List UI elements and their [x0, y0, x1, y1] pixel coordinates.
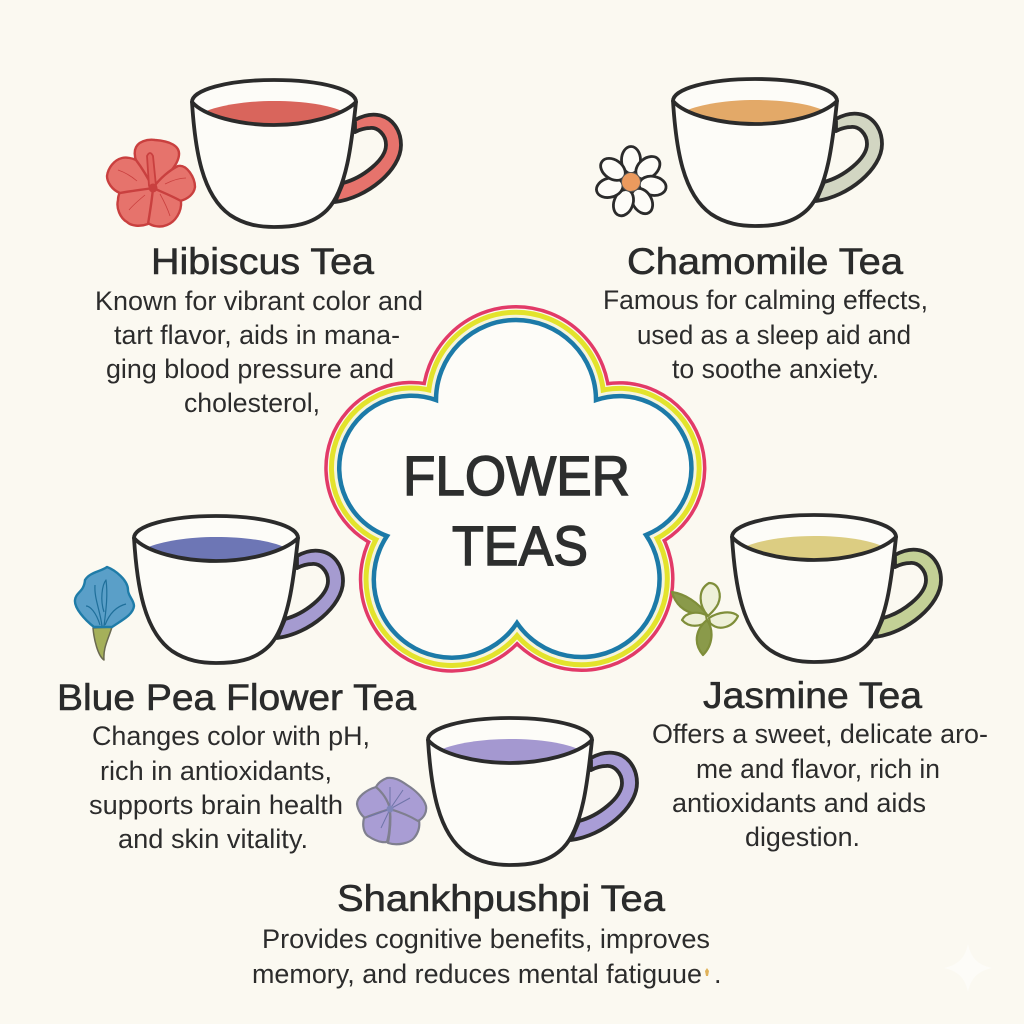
text: hibiscus description: cholesterol, — [184, 388, 320, 418]
cup: blue pea — [134, 516, 343, 663]
title: TEAS — [452, 514, 588, 577]
text: blue pea description: and skin vitality. — [118, 824, 308, 854]
icon: shankhpushpi flower — [357, 778, 426, 844]
text: hibiscus description: tart flavor, aids in mana- — [114, 320, 400, 350]
text: jasmine description: digestion. — [745, 822, 860, 852]
text: blue pea description: Changes color with pH, — [92, 721, 370, 751]
icon: jasmine flower — [672, 583, 738, 655]
cup: hibiscus — [192, 80, 401, 227]
text: jasmine description: antioxidants and aids — [672, 788, 926, 818]
icon: blue pea flower — [75, 567, 134, 660]
text: hibiscus description — [95, 286, 423, 418]
heading: jasmine: Jasmine Tea — [703, 675, 922, 716]
title — [403, 444, 630, 577]
text: blue pea description — [89, 721, 370, 854]
text: jasmine description: me and flavor, rich in — [696, 754, 940, 784]
text: shankhpushpi description — [252, 924, 722, 989]
watermark sparkle — [944, 944, 992, 992]
text: chamomile description: to soothe anxiety. — [672, 354, 879, 384]
text: shankhpushpi description: . — [714, 959, 722, 989]
central flower badge — [339, 320, 691, 658]
text: hibiscus description: ging blood pressure and — [106, 354, 394, 384]
text: chamomile description: used as a sleep aid and — [637, 320, 911, 350]
heading: chamomile: Chamomile Tea — [627, 241, 903, 282]
small gold mark — [705, 968, 709, 976]
heading: blue pea: Blue Pea Flower Tea — [57, 677, 416, 718]
text: chamomile description: Famous for calming effects, — [603, 285, 928, 315]
text: blue pea description: rich in antioxidants, — [100, 756, 332, 786]
cup: shankhpushpi — [428, 718, 637, 865]
heading: hibiscus: Hibiscus Tea — [151, 241, 374, 282]
cup: chamomile — [673, 79, 882, 226]
icon: hibiscus flower — [107, 140, 195, 226]
text: shankhpushpi description: memory, and reduces mental fatiguue — [252, 959, 702, 989]
title: FLOWER — [403, 444, 630, 507]
cup: jasmine — [732, 515, 941, 662]
text: shankhpushpi description: Provides cognitive benefits, improves — [262, 924, 710, 954]
heading: shankhpushpi: Shankhpushpi Tea — [337, 878, 665, 919]
text: hibiscus description: Known for vibrant color and — [95, 286, 423, 316]
text: jasmine description — [652, 719, 988, 852]
icon: chamomile flower — [594, 146, 668, 219]
text: blue pea description: supports brain health — [89, 790, 343, 820]
text: jasmine description: Offers a sweet, delicate aro- — [652, 719, 988, 749]
text: chamomile description — [603, 285, 928, 384]
